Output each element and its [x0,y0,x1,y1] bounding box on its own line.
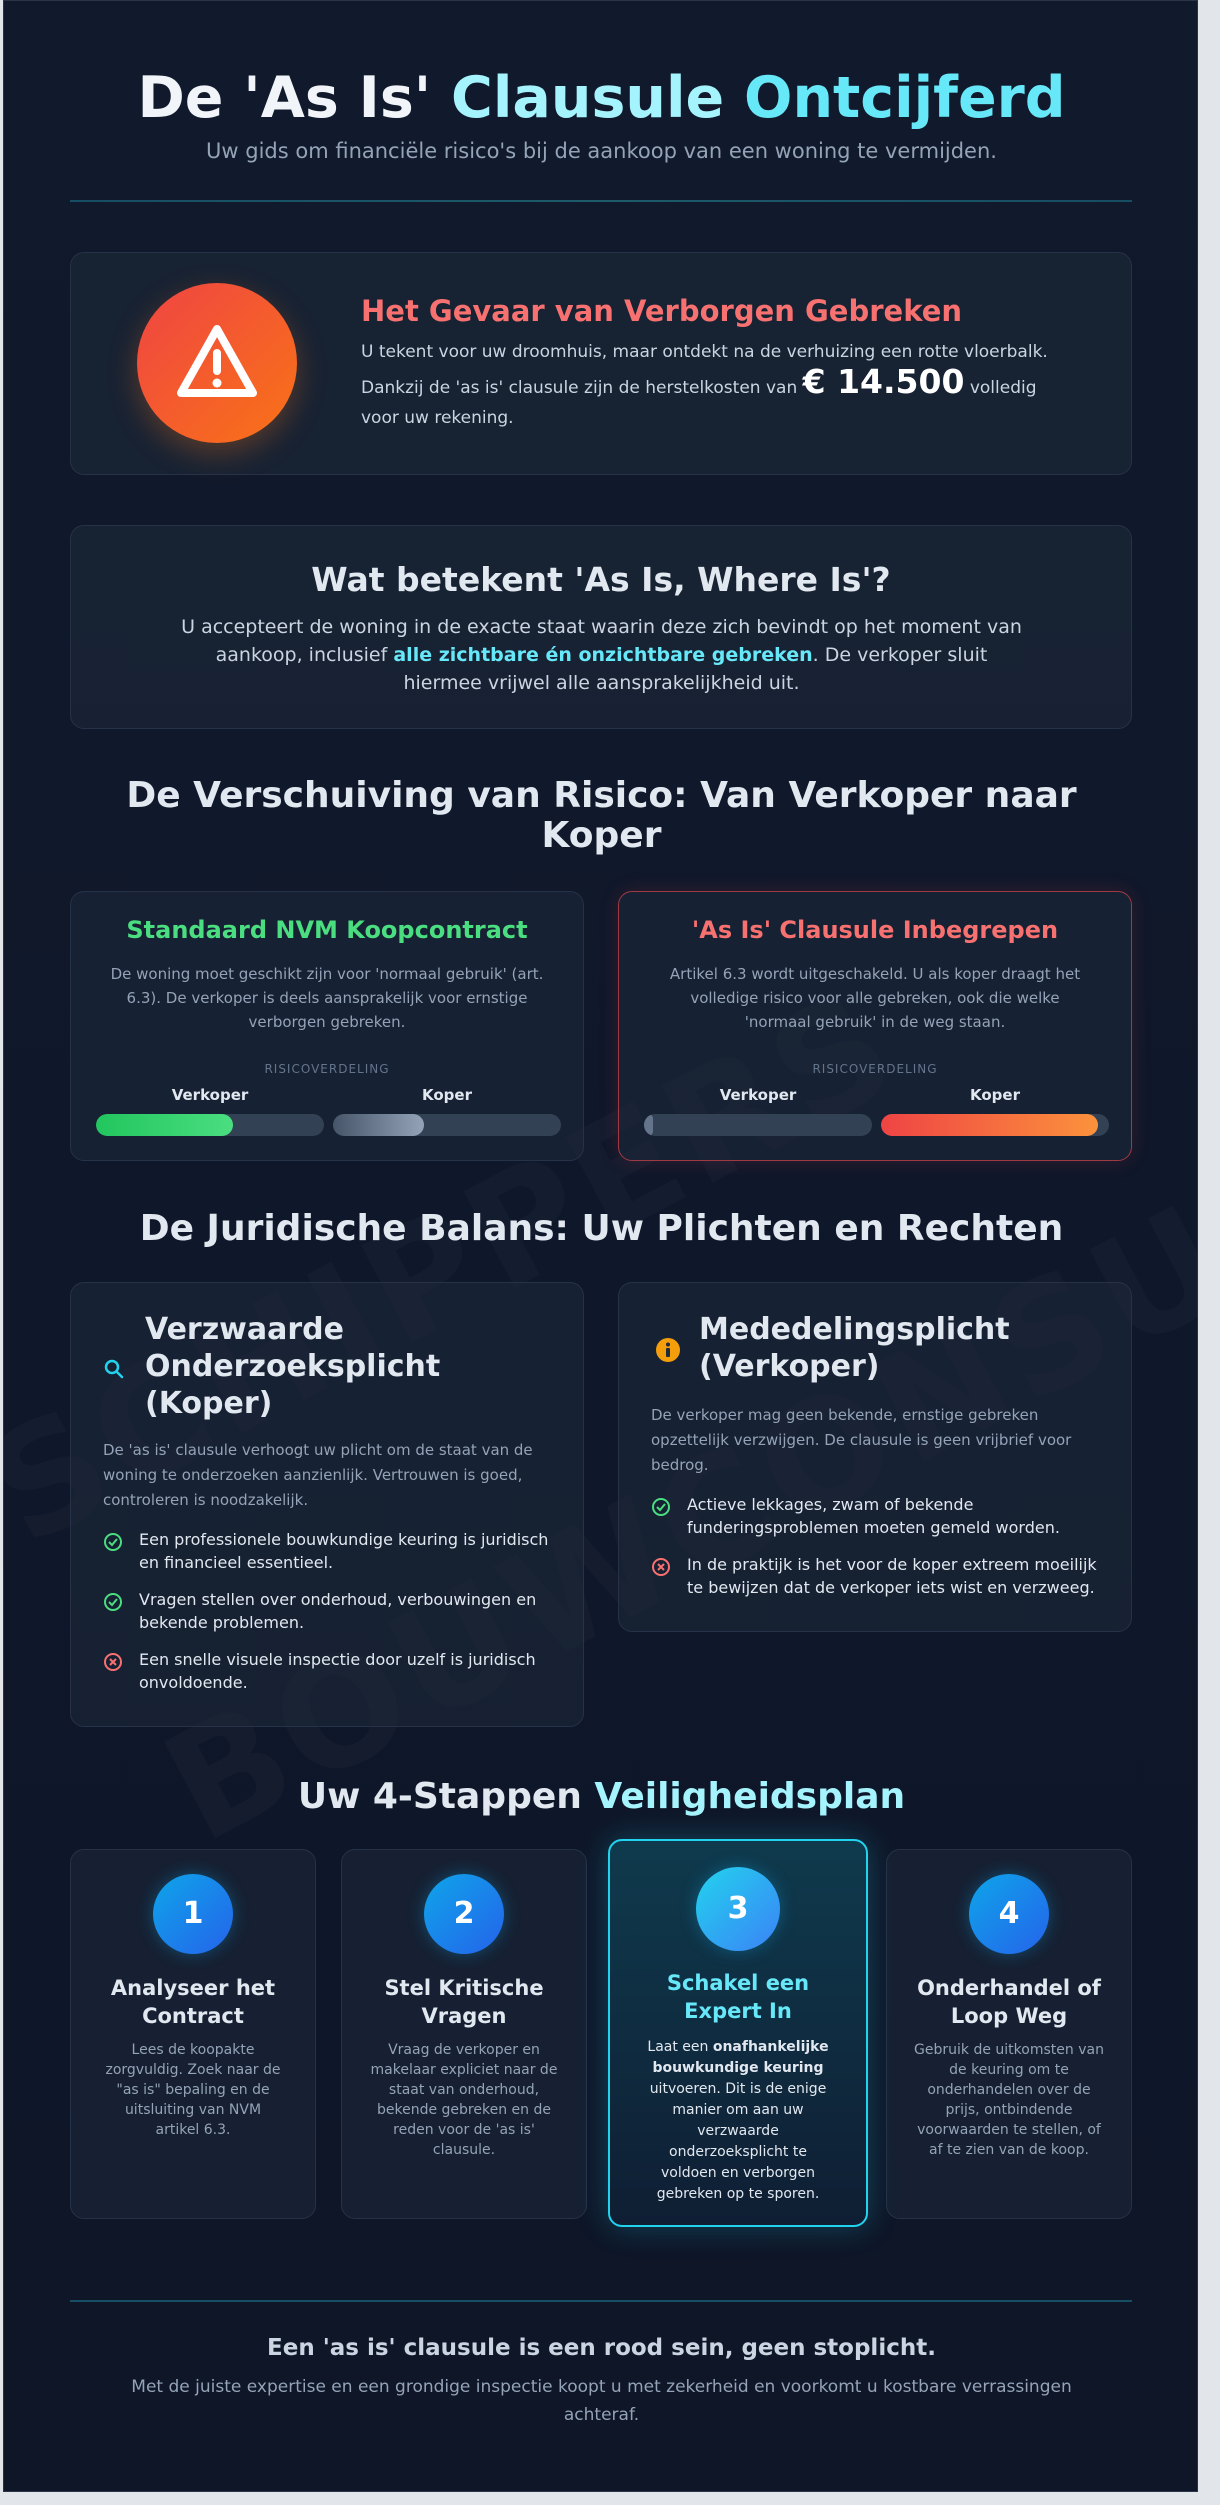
step 3: Laat een onafhankelijke bouwkundige keuring uitvoeren. Dit is de enige manier om aan uw verzwaarde onderzoeksplicht te voldoen en verborgen gebreken op te sporen. [647,2039,829,2202]
panel: seller duty: Mededelingsplicht (Verkoper) [699,1312,1010,1384]
bar chart: as is: Verkoper [720,1086,796,1104]
title: De 'As Is' Clausule Ontcijferd [137,65,1066,131]
panel: as is clause: RISICOVERDELING [812,1062,938,1076]
step 4: Onderhandel of [917,1976,1101,2000]
subtitle: Uw gids om financiële risico's bij de aankoop van een woning te vermijden. [206,139,997,163]
step 4: Loop Weg [951,2004,1067,2028]
panel: buyer duty: Verzwaarde Onderzoeksplicht (Koper) [145,1312,440,1421]
heading: 4 steps: Uw 4-Stappen Veiligheidsplan [298,1776,905,1817]
heading: legal balance: De Juridische Balans: Uw Plichten en Rechten [140,1208,1063,1249]
panel: standard contract: De woning moet geschikt zijn voor 'normaal gebruik' (art. 6.3). De verkoper is deels aansprakelijk voor ernstige verborgen gebreken. [111,965,543,1031]
list: buyer items: Vragen stellen over onderhoud, verbouwingen en bekende problemen. [139,1590,536,1632]
step 2: Vraag de verkoper en makelaar expliciet naar de staat van onderhoud, bekende gebreken en de reden voor de 'as is' clausule. [371,2042,557,2158]
step 1: Lees de koopakte zorgvuldig. Zoek naar de "as is" bepaling en de uitsluiting van NVM artikel 6.3. [106,2042,280,2138]
step 1: 1 [183,1896,203,1931]
panel: hidden defects [70,252,1132,475]
bar chart: standard: Koper [422,1086,472,1104]
list: buyer items: Een professionele bouwkundige keuring is juridisch en financieel essentieel. [139,1530,548,1572]
panel: as is clause: Artikel 6.3 wordt uitgeschakeld. U als koper draagt het volledige risico voor alle gebreken, ook die welke 'normaal gebruik' in de weg staan. [670,965,1080,1031]
list: seller items: In de praktijk is het voor de koper extreem moeilijk te bewijzen dat de verkoper iets wist en verzweeg. [687,1555,1097,1597]
panel: buyer duty [70,1282,584,1727]
panel: definition [70,525,1132,729]
text: Dankzij de 'as is' clausule zijn de herstelkosten van € 14.500 volledig voor uw rekening. [361,362,1037,428]
step 3: 3 [728,1891,748,1926]
step 1: Analyseer het [111,1976,275,2000]
icon: warning [137,283,297,443]
heading: risk shift: De Verschuiving van Risico: Van Verkoper naar Koper [126,775,1077,856]
step 4 [886,1849,1132,2219]
footer heading: Een 'as is' clausule is een rood sein, geen stoplicht. [267,2335,936,2361]
text: U accepteert de woning in de exacte staat waarin deze zich bevindt op het moment van aankoop, inclusief alle zichtbare én onzichtbare gebreken. De verkoper sluit hiermee vrijwel alle aansprakelijkheid uit. [181,616,1022,694]
panel: standard contract [70,891,584,1161]
step 3 [608,1839,868,2227]
list: seller items: Actieve lekkages, zwam of bekende funderingsproblemen moeten gemeld worden. [687,1495,1060,1537]
list: buyer items: Een snelle visuele inspectie door uzelf is juridisch onvoldoende. [139,1650,536,1692]
heading: Het Gevaar van Verborgen Gebreken [361,294,962,328]
list: seller items [652,1495,1097,1597]
icon: search [104,1360,124,1378]
step 1: Contract [142,2004,244,2028]
step 2: Vragen [421,2004,506,2028]
icon: info [656,1338,680,1362]
panel: as is clause: 'As Is' Clausule Inbegrepen [692,916,1058,944]
step 4: Gebruik de uitkomsten van de keuring om te onderhandelen over de prijs, ontbindende voorwaarden te stellen, of af te zien van de koop. [914,2042,1104,2158]
heading: Wat betekent 'As Is, Where Is'? [311,560,891,599]
panel: as is clause [618,891,1132,1161]
list: buyer items [104,1530,548,1692]
bar chart: standard [96,1086,561,1136]
panel: seller duty [618,1282,1132,1632]
footer text: Met de juiste expertise en een grondige inspectie koopt u met zekerheid en voorkomt u kostbare verrassingen achteraf. [131,2377,1072,2425]
bar chart: standard: Verkoper [172,1086,248,1104]
step 4: 4 [999,1896,1019,1931]
bar chart: as is: Koper [970,1086,1020,1104]
panel: standard contract: Standaard NVM Koopcontract [126,916,528,944]
step 2 [341,1849,587,2219]
text: U tekent voor uw droomhuis, maar ontdekt na de verhuizing een rotte vloerbalk. [361,342,1048,362]
panel: buyer duty: De 'as is' clausule verhoogt uw plicht om de staat van de woning te onderzoeken aanzienlijk. Vertrouwen is goed, controleren is noodzakelijk. [103,1441,533,1509]
panel: seller duty: De verkoper mag geen bekende, ernstige gebreken opzettelijk verzwijgen. De clausule is geen vrijbrief voor bedrog. [651,1406,1071,1474]
panel: standard contract: RISICOVERDELING [264,1062,390,1076]
step 1 [70,1849,316,2219]
step 3: Expert In [684,1999,792,2023]
step 2: 2 [454,1896,474,1931]
bar chart: as is [644,1086,1109,1136]
step 2: Stel Kritische [384,1976,544,2000]
step 3: Schakel een [667,1971,809,1995]
